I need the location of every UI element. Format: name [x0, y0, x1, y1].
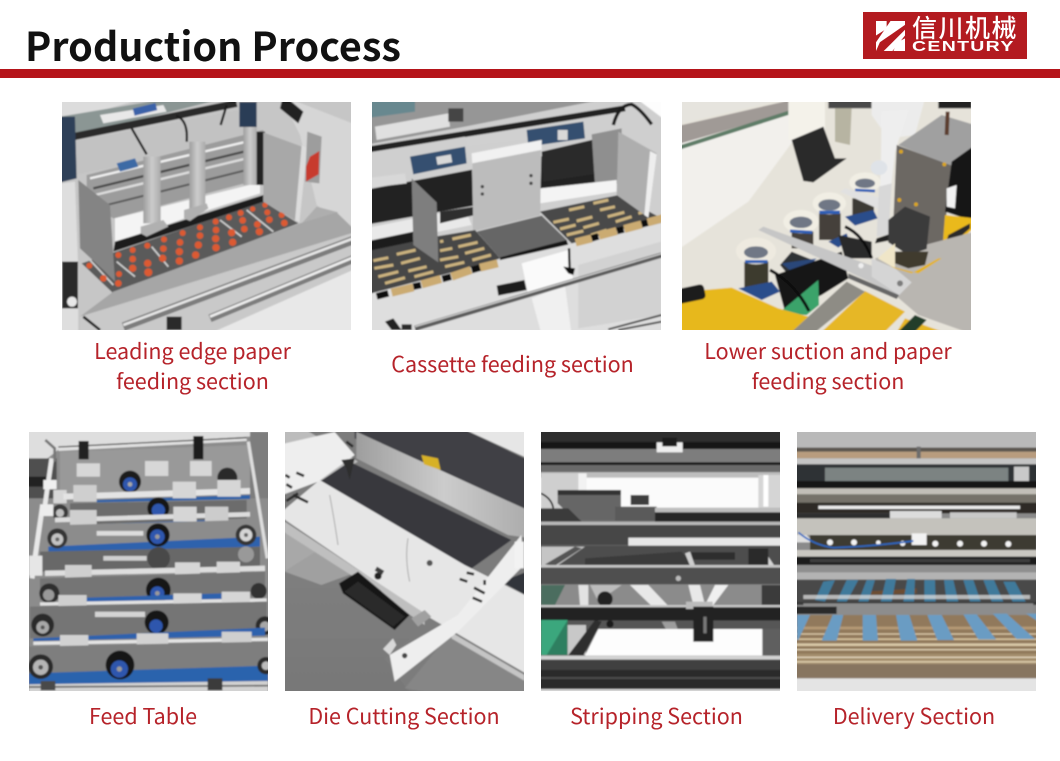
icon: logo mark	[876, 21, 905, 51]
header red rule	[0, 69, 1060, 78]
logo latin name: CENTURY	[912, 38, 1015, 55]
photo: feed table	[29, 432, 268, 691]
photo: delivery section	[797, 432, 1036, 691]
photo: die cutting section	[285, 432, 524, 691]
logo: Century	[863, 12, 1027, 59]
label: lower suction: feeding section	[752, 365, 904, 396]
photo: lower suction and paper feeding section	[682, 102, 971, 330]
label: delivery section: Delivery Section	[833, 700, 995, 731]
label: leading edge: feeding section	[116, 365, 269, 396]
label: feed table: Feed Table	[89, 700, 197, 731]
label: stripping section: Stripping Section	[570, 700, 743, 731]
label: leading edge	[94, 335, 291, 396]
title: Production Process	[25, 16, 401, 73]
label: leading edge: Leading edge paper	[94, 335, 291, 366]
label: lower suction: Lower suction and paper	[704, 335, 952, 366]
photo: stripping section	[541, 432, 780, 691]
label: lower suction	[704, 335, 952, 396]
label: die cutting section: Die Cutting Section	[308, 700, 500, 731]
photo: cassette feeding section	[372, 102, 661, 330]
photo: leading edge paper feeding section	[62, 102, 351, 330]
label: cassette: Cassette feeding section	[391, 348, 634, 379]
